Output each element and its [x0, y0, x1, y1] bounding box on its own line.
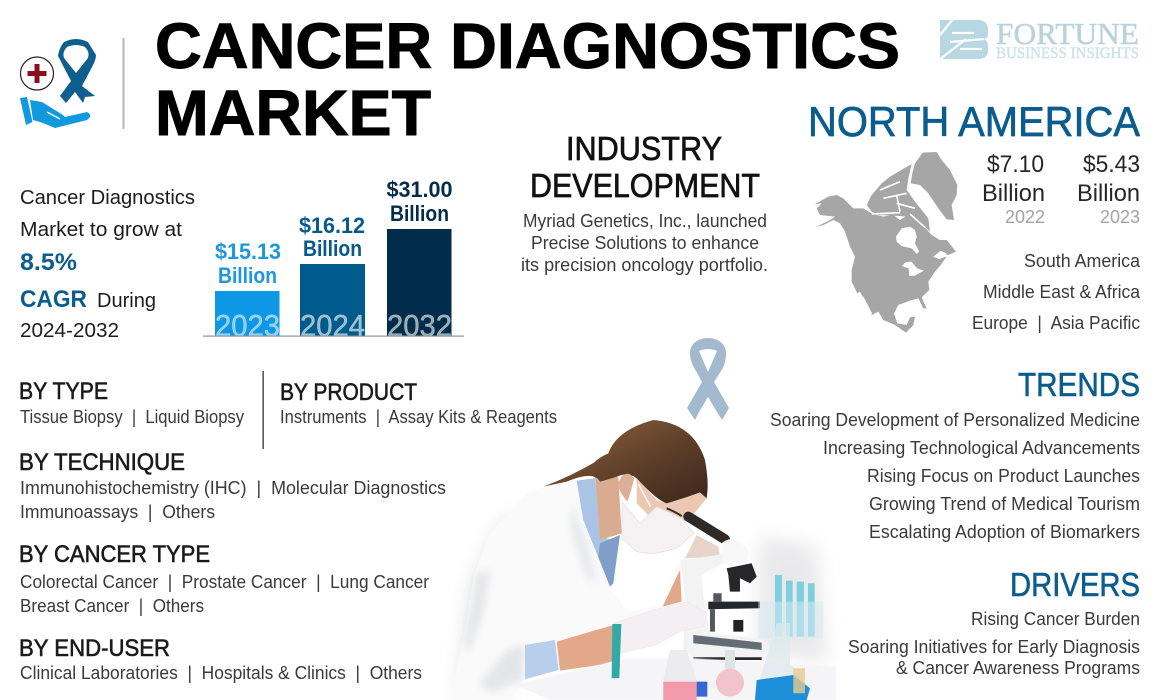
list: other regions: Europe | Asia Pacific	[972, 313, 1140, 333]
neck	[595, 477, 622, 540]
bar chart: market size	[203, 177, 464, 343]
bar 2032: Billion	[390, 201, 449, 226]
segment: by technique: Immunohistochemistry (IHC) | Molecular Diagnostics	[20, 478, 446, 498]
hand behind eyepiece	[685, 535, 720, 558]
panel: trends: Increasing Technological Advancements	[823, 438, 1140, 458]
bar 2032	[386, 177, 452, 343]
segment: by product: BY PRODUCT	[280, 379, 417, 406]
text block: market growth: Market to grow at	[20, 219, 182, 241]
panel: trends	[770, 366, 1140, 542]
description: Precise Solutions to enhance	[531, 233, 759, 253]
segment divider	[262, 371, 264, 449]
illustration: scientist at microscope	[450, 420, 837, 700]
text block: market growth: 8.5%	[20, 249, 77, 276]
glove	[613, 602, 707, 655]
heading	[530, 130, 760, 204]
list: other regions: Middle East & Africa	[983, 282, 1141, 302]
bar 2024: 2024	[300, 308, 365, 343]
segment: by type: Tissue Biopsy | Liquid Biopsy	[20, 407, 244, 427]
bar 2024: Billion	[303, 236, 362, 261]
stat: 2023: 2023	[1100, 207, 1140, 227]
icon: blue ribbon	[58, 39, 96, 103]
stat: 2022: 2022	[1005, 207, 1045, 227]
Arctic islands	[867, 164, 930, 232]
icon: blue hand	[20, 97, 90, 128]
logo divider	[122, 38, 124, 129]
heading: DEVELOPMENT	[530, 167, 760, 204]
heading: TRENDS	[1018, 366, 1140, 403]
segment: by cancer type: BY CANCER TYPE	[19, 541, 210, 568]
bar 2032: $31.00	[386, 177, 452, 202]
microscope eyepiece	[688, 517, 725, 539]
stat: 2023: $5.43	[1083, 151, 1140, 178]
segment: by cancer type: Colorectal Cancer | Prostate Cancer | Lung Cancer	[20, 572, 429, 592]
coat shading	[463, 503, 597, 693]
stats: North America market values	[982, 151, 1140, 227]
text block: market growth: During	[97, 290, 156, 312]
panel: drivers	[848, 566, 1140, 678]
segment: by type: BY TYPE	[19, 378, 108, 405]
segment: by product: Instruments | Assay Kits & Reagents	[280, 407, 557, 427]
bar 2024: $16.12	[299, 213, 365, 238]
description	[521, 211, 768, 275]
forearm	[557, 570, 682, 671]
stat: 2022: Billion	[982, 180, 1045, 207]
panel: trends: Escalating Adoption of Biomarkers	[869, 522, 1140, 542]
logo mark	[939, 19, 988, 60]
teal test tube	[612, 624, 621, 678]
segment: by end-user	[19, 635, 422, 683]
list: other regions	[972, 251, 1141, 333]
panel: trends: Rising Focus on Product Launches	[867, 466, 1140, 486]
shirt collar	[577, 478, 620, 587]
panel: trends: Soaring Development of Personalized Medicine	[770, 410, 1140, 430]
segment: by type	[19, 378, 244, 427]
heading: INDUSTRY	[566, 130, 722, 167]
face and ear	[617, 474, 707, 521]
description: Myriad Genetics, Inc., launched	[523, 211, 767, 231]
logo: Fortune Business Insights	[939, 16, 1139, 62]
face mask	[622, 484, 694, 554]
chart axis	[203, 336, 464, 337]
logo: Fortune Business Insights: BUSINESS INSIGHTS	[996, 45, 1139, 62]
segment: by cancer type: Breast Cancer | Others	[20, 596, 204, 616]
heading: DRIVERS	[1010, 566, 1140, 603]
text block: market growth: 2024-2032	[20, 320, 119, 342]
text block: market growth	[20, 187, 195, 342]
bar 2023: $15.13	[215, 239, 281, 264]
bar 2023	[215, 239, 281, 343]
text block: market growth: Cancer Diagnostics	[20, 187, 195, 209]
shirt cuff	[525, 640, 559, 679]
map: North America	[815, 152, 957, 333]
microscope	[681, 517, 765, 660]
panel: drivers: & Cancer Awareness Programs	[896, 658, 1140, 678]
stat: 2022	[982, 151, 1045, 227]
segment: by technique: Immunoassays | Others	[20, 502, 215, 522]
Hudson Bay and lakes	[896, 227, 947, 276]
blue test tube rack	[758, 575, 823, 638]
hair	[543, 420, 708, 503]
stat: 2023	[1077, 151, 1140, 227]
segment: by product	[280, 379, 557, 427]
bar 2024	[299, 213, 365, 343]
segment: by cancer type	[19, 541, 429, 616]
title	[155, 10, 900, 149]
panel: trends: Growing Trend of Medical Tourism	[869, 494, 1140, 514]
icon: red cross in circle	[20, 57, 54, 90]
text block: market growth: CAGR	[20, 286, 87, 313]
segment: by technique: BY TECHNIQUE	[19, 449, 185, 476]
title: CANCER DIAGNOSTICS	[155, 10, 900, 82]
heading: North America: NORTH AMERICA	[808, 98, 1140, 145]
bar 2032: 2032	[387, 308, 452, 343]
text block: industry development	[521, 130, 768, 275]
icon: medical hand and ribbon	[20, 39, 96, 128]
segment: by technique	[19, 449, 446, 522]
lab coat	[450, 480, 697, 700]
segment: by end-user: BY END-USER	[19, 635, 170, 662]
bar 2023: 2023	[215, 308, 280, 343]
stat: 2023: Billion	[1077, 180, 1140, 207]
list: other regions: South America	[1024, 251, 1141, 271]
panel: drivers: Rising Cancer Burden	[971, 609, 1140, 629]
panel: drivers: Soaring Initiatives for Early Diagnosis	[848, 637, 1140, 657]
logo: Fortune Business Insights: FORTUNE	[996, 16, 1139, 51]
segment: by end-user: Clinical Laboratories | Hospitals & Clinics | Others	[20, 663, 422, 683]
mainland	[815, 195, 956, 333]
Greenland	[911, 152, 957, 220]
lab table	[515, 658, 837, 700]
bar 2023: Billion	[218, 263, 277, 288]
icon: pale awareness ribbon	[687, 338, 729, 420]
stat: 2022: $7.10	[987, 151, 1044, 178]
flasks	[663, 623, 810, 700]
background haze	[457, 503, 827, 700]
description: its precision oncology portfolio.	[521, 255, 768, 275]
title: MARKET	[155, 77, 431, 149]
